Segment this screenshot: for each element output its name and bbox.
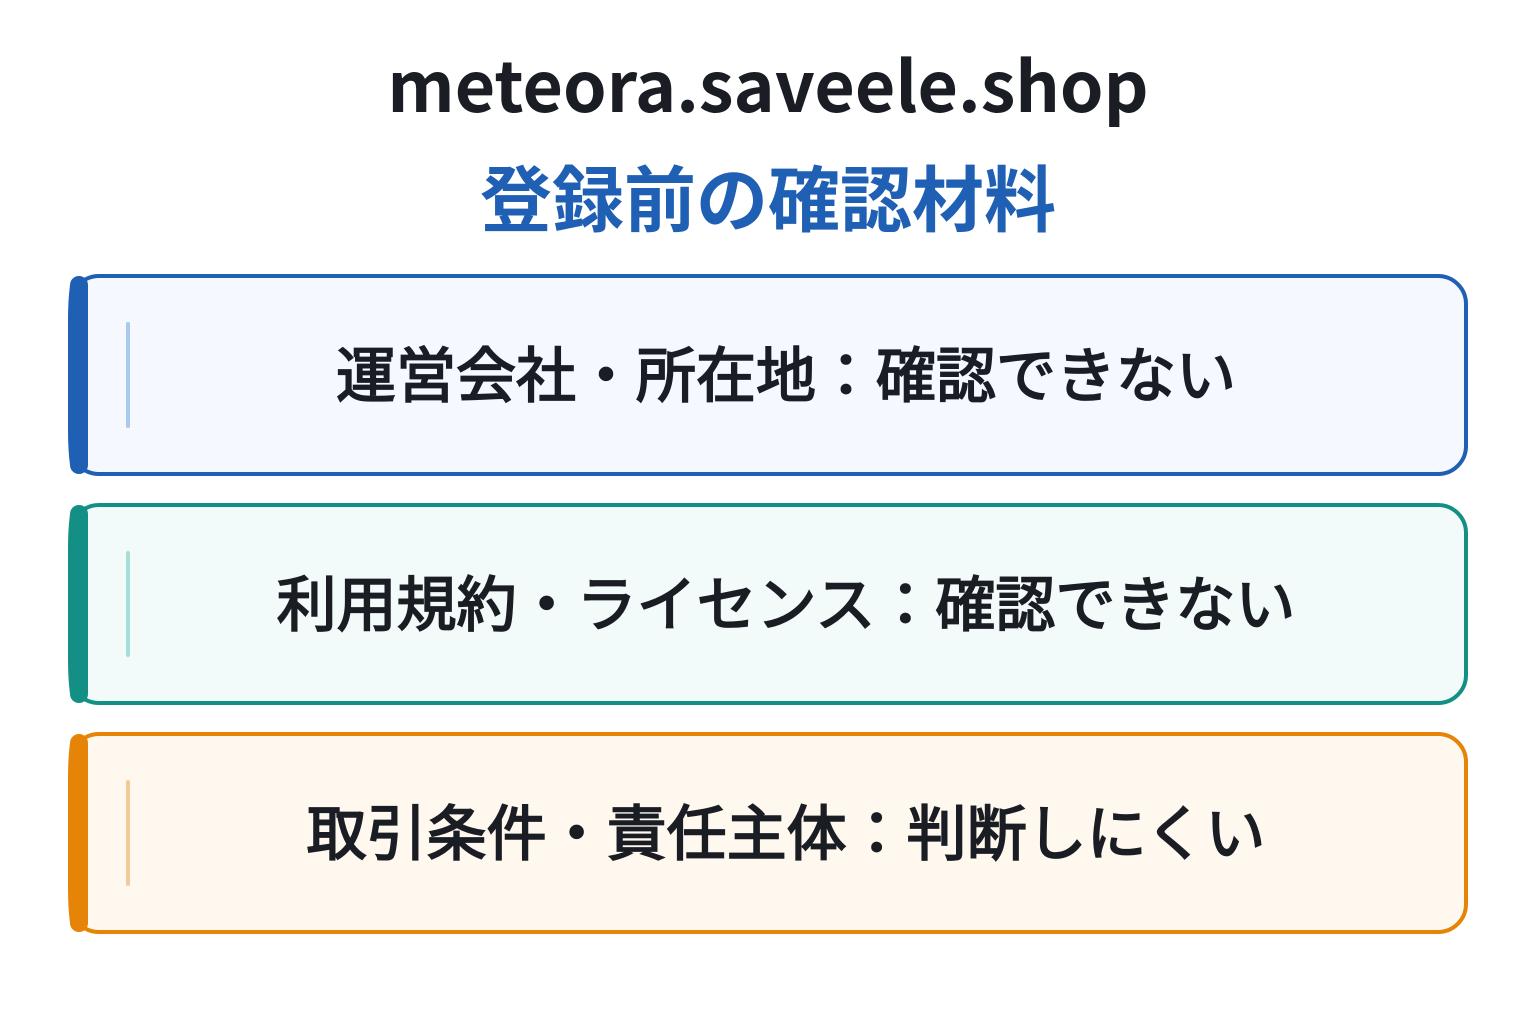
accent bar [68, 505, 88, 703]
inner line [126, 780, 130, 886]
panel: trade conditions [68, 734, 1466, 932]
panel box [71, 734, 1466, 932]
inner line [126, 322, 130, 428]
accent bar [68, 276, 88, 474]
panel box [71, 276, 1466, 474]
panel: company info [68, 276, 1466, 474]
subtitle heading: 登録前の確認材料 [480, 142, 1056, 247]
accent bar [68, 734, 88, 932]
panel: terms [68, 505, 1466, 703]
inner line [126, 551, 130, 657]
panel box [71, 505, 1466, 703]
panel text: 利用規約・ライセンス：確認できない [277, 557, 1295, 644]
title: meteora.saveele.shop [387, 32, 1149, 133]
panel text: 運営会社・所在地：確認できない [336, 328, 1236, 415]
panel text: 取引条件・責任主体：判断しにくい [307, 786, 1265, 873]
